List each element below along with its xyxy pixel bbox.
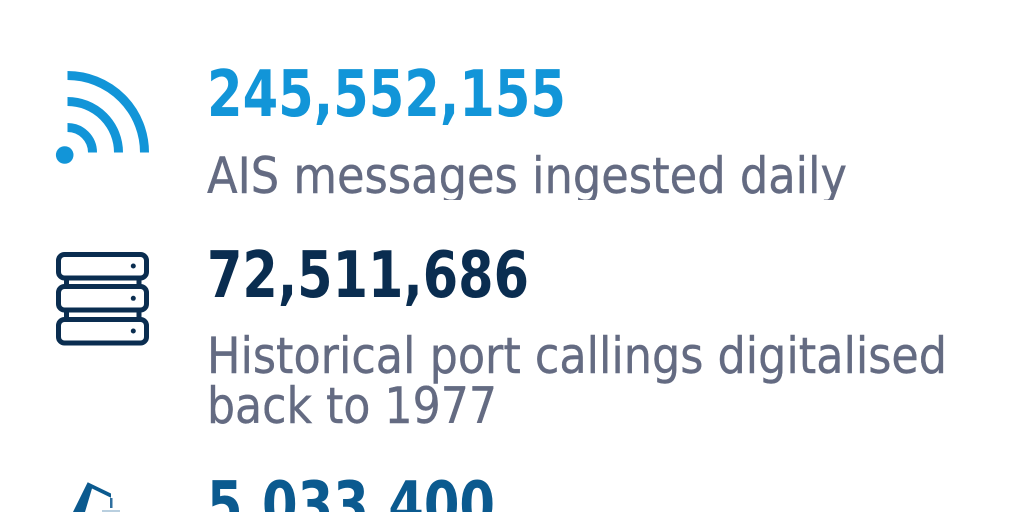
number: 245,552,155: 245,552,155	[207, 58, 566, 132]
label: historical port callings: back to 1977	[207, 377, 497, 435]
label: historical port callings	[207, 327, 947, 435]
label: historical port callings: Historical port callings digitalised	[207, 327, 947, 385]
icon: wifi signal	[56, 76, 145, 164]
stat: port callings	[58, 239, 947, 435]
stat: third, cut off at the bottom	[73, 480, 492, 512]
number: 72,511,686: 72,511,686	[207, 239, 529, 313]
infographic canvas	[56, 68, 944, 512]
icon: server stack	[58, 254, 146, 343]
label: AIS messages ingested daily: AIS messages ingested daily	[207, 147, 847, 205]
stat: AIS messages	[56, 68, 846, 200]
icon: crane	[73, 482, 120, 512]
